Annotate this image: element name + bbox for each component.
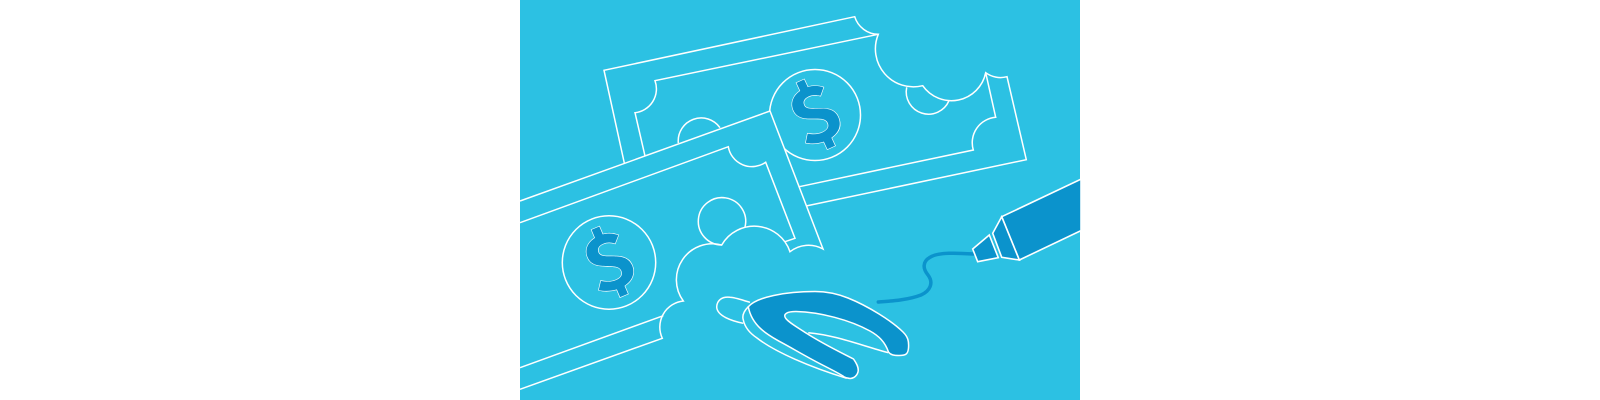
panel: blue background (520, 0, 1080, 400)
marker collar (993, 217, 1019, 260)
banknote: back bill (604, 17, 1026, 206)
icon: dollar sign on front bill: $ (564, 198, 652, 317)
coin: front bill (562, 216, 656, 309)
marker body (1002, 179, 1081, 260)
coin: back bill (770, 70, 860, 160)
icon: marker (878, 179, 1081, 302)
banknote: front bill (520, 111, 823, 389)
icon: dollar sign on back bill: $ (768, 50, 859, 170)
marker ink line (878, 253, 973, 302)
marker tip (973, 235, 998, 262)
scribble: marker ink shape (717, 292, 909, 378)
